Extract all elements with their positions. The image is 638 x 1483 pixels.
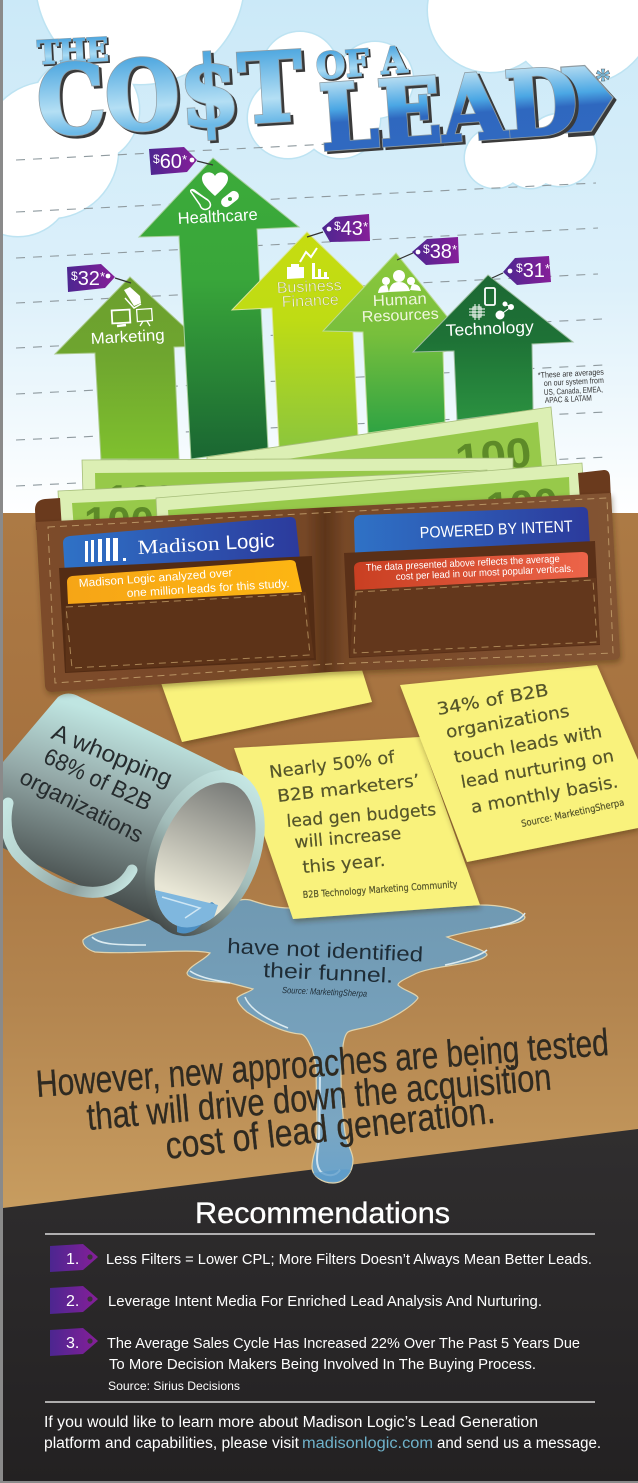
contact paragraph: and send us a message. <box>437 1435 601 1452</box>
title: of a: OF A <box>314 39 409 88</box>
tag: $31: $ <box>516 261 523 275</box>
title: Lead: LEAD <box>316 48 581 172</box>
mug body <box>3 694 243 933</box>
right blue card: POWERED BY INTENT <box>419 518 573 542</box>
wallet stitching <box>48 498 613 683</box>
bill 1: 100 <box>453 428 534 483</box>
tag: $32 <box>67 264 131 292</box>
left pocket front <box>65 592 314 672</box>
icon: people <box>378 270 421 293</box>
mug text <box>20 726 172 842</box>
footnote <box>538 368 604 405</box>
tag: 3: 3. <box>66 1335 79 1352</box>
table surface <box>3 513 638 1213</box>
icon: chip <box>469 304 485 320</box>
tag: $43: $ <box>334 219 341 233</box>
label: Business Finance <box>276 277 342 311</box>
sticky note: 50%: Nearly 50% of <box>268 748 397 783</box>
money bills <box>58 407 586 545</box>
title: of a: OF A <box>316 40 411 89</box>
icon: bar chart <box>312 263 329 279</box>
sticky note: 34%: organizations <box>444 701 571 743</box>
title: Cost: CO$T <box>36 34 309 160</box>
icon: briefcase <box>287 264 304 279</box>
tag: $43: 43 <box>341 218 363 240</box>
title: Cost: CO$T <box>34 31 306 158</box>
left blue card <box>63 517 300 575</box>
tag: 1: 1. <box>66 1251 79 1268</box>
sticky note: blank <box>160 670 372 742</box>
panel: recommendations <box>0 1197 638 1483</box>
wallet <box>35 470 620 692</box>
panel: recommendations background <box>3 1129 638 1483</box>
label: Business Finance: Finance <box>281 292 339 311</box>
puddle highlights <box>92 913 525 1028</box>
title: The: THE <box>36 30 109 72</box>
recommendations heading: Recommendations <box>195 1197 450 1230</box>
bill 2 <box>82 458 513 530</box>
red card: cost per lead in our most popular verticals. <box>396 564 574 583</box>
tag: $38: * <box>452 242 457 257</box>
yellow card: Madison Logic analyzed over <box>78 567 233 590</box>
wallet back <box>35 470 611 530</box>
closing statement: cost of lead generation. <box>163 1090 497 1168</box>
tag: $31: 31 <box>523 260 545 282</box>
mug <box>3 694 265 936</box>
bill 2: 100 <box>106 476 176 523</box>
puddle text: their funnel. <box>263 959 394 988</box>
sticky note: 34%: lead nurturing on <box>459 746 616 793</box>
tag: $32: 32 <box>78 268 100 290</box>
arrow: Marketing <box>55 277 205 459</box>
tag: 2 <box>50 1286 98 1314</box>
mug text: A whopping <box>48 719 176 792</box>
closing statement <box>35 1022 610 1168</box>
arrow: Healthcare <box>139 158 299 459</box>
title <box>34 30 620 174</box>
label: Human Resources <box>361 291 439 326</box>
footnote: *These are averages <box>538 368 604 380</box>
sticky note: 50%: lead gen budgets <box>286 800 437 832</box>
logo mark <box>85 538 126 562</box>
icon: molecule <box>496 302 514 319</box>
mug rim <box>147 770 265 936</box>
tag: $38 <box>397 237 459 265</box>
bill 1 <box>207 407 558 483</box>
tag: $31: * <box>545 261 550 276</box>
sticky note: 34% <box>400 665 638 862</box>
icon: price tag <box>124 287 141 308</box>
page edge <box>0 0 3 1483</box>
clouds <box>0 0 638 236</box>
sticky note: 50%: B2B marketers’ <box>276 771 421 807</box>
left pocket back <box>59 556 316 673</box>
bill 3 <box>156 463 586 540</box>
sticky note: 50%: will increase <box>294 824 402 853</box>
bill 3: 100 <box>484 479 559 531</box>
icon: thermometer <box>191 190 210 209</box>
icon: bandage <box>219 189 241 209</box>
drip shade <box>313 1169 351 1181</box>
Madison Logic wordmark: Madison <box>137 533 220 559</box>
title: The: THE <box>36 30 109 72</box>
title: Cost: CO$T <box>34 31 306 158</box>
tag: $38: $ <box>423 242 430 256</box>
footnote: US, Canada, EMEA, <box>544 385 603 397</box>
tag: 1 <box>50 1244 98 1272</box>
mug handle <box>6 803 132 892</box>
arrow: Human Resources <box>323 253 470 433</box>
recommendation 2 <box>50 1286 542 1314</box>
footnote: APAC & LATAM <box>545 394 592 405</box>
mug text: 68% of B2B <box>40 743 156 816</box>
mug interior <box>154 782 256 926</box>
yellow card <box>67 560 302 604</box>
title: Lead: LEAD <box>319 50 584 174</box>
recommendation 1: Less Filters = Lower CPL; More Filters Doesn’t Always Mean Better Leads. <box>106 1252 592 1268</box>
sticky note: 50% <box>234 737 480 919</box>
rim water <box>177 902 216 933</box>
contact paragraph: platform and capabilities, please visit <box>44 1435 300 1452</box>
icon: phone <box>485 288 495 305</box>
icon: line chart <box>300 248 317 262</box>
recommendation 1 <box>50 1244 592 1272</box>
red card: The data presented above reflects the average <box>366 554 560 574</box>
right blue card <box>354 507 590 556</box>
label: Marketing: Marketing <box>90 327 165 348</box>
water in mug <box>155 890 218 928</box>
tag: $32: * <box>100 269 105 284</box>
recommendation 2: Leverage Intent Media For Enriched Lead Analysis And Nurturing. <box>108 1294 542 1310</box>
tag: $60: 60 <box>160 151 182 173</box>
puddle text: Source: MarketingSherpa <box>282 985 367 999</box>
bill 4 <box>58 470 490 545</box>
title: asterisk: * <box>595 61 611 97</box>
label: Human Resources: Human <box>372 291 427 310</box>
sticky note: 50%: this year. <box>302 851 386 878</box>
tag: $43: * <box>363 219 368 234</box>
tag: 3 <box>50 1328 98 1356</box>
tag: $31 <box>492 256 551 285</box>
sticky note: 50%: B2B Technology Marketing Community <box>302 879 458 901</box>
Madison Logic wordmark <box>137 530 275 559</box>
label: Business Finance: Business <box>276 277 342 297</box>
recommendation 3: Source: Sirius Decisions <box>108 1379 240 1393</box>
sticky note: 34%: touch leads with <box>452 722 604 768</box>
right pocket front <box>350 578 600 657</box>
red card <box>354 552 588 590</box>
sticky note: 34%: Source: MarketingSherpa <box>520 797 625 830</box>
puddle and drip <box>83 899 525 1183</box>
arrow: Technology <box>413 275 573 420</box>
title: Lead: LEAD <box>316 48 581 172</box>
contact paragraph <box>44 1414 601 1452</box>
title: of a: OF A <box>314 39 409 88</box>
footnote: on our system from <box>544 376 604 388</box>
tag: $38: 38 <box>430 241 452 263</box>
puddle text: have not identified <box>227 935 424 967</box>
icon: heart <box>202 172 228 196</box>
sky background <box>0 0 638 515</box>
recommendation 3: The Average Sales Cycle Has Increased 22% Over The Past 5 Years Due <box>107 1336 580 1352</box>
tag: $60 <box>149 147 213 175</box>
tag: $32: $ <box>71 269 78 283</box>
label: Human Resources: Resources <box>361 306 439 326</box>
arrow: Business Finance <box>232 232 382 447</box>
label: Technology: Technology <box>445 318 535 340</box>
tag: $43 <box>307 214 370 242</box>
icon: monitor and easel <box>112 309 152 326</box>
puddle text <box>227 935 424 999</box>
bill 4: 100 <box>84 498 154 545</box>
recommendation 3 <box>50 1328 580 1393</box>
tag: $60: $ <box>153 152 160 166</box>
recommendation 3: To More Decision Makers Being Involved In The Buying Process. <box>109 1357 536 1373</box>
mug text: organizations <box>16 763 148 848</box>
right pocket back <box>344 541 600 658</box>
tag: $60: * <box>182 152 187 167</box>
wallet body <box>36 493 620 692</box>
drip highlight <box>317 1077 340 1175</box>
contact paragraph: If you would like to learn more about Madison Logic’s Lead Generation <box>44 1414 538 1431</box>
sticky note: 34%: a monthly basis. <box>469 772 620 818</box>
title: The: THE <box>38 32 111 73</box>
label: Healthcare: Healthcare <box>177 206 258 228</box>
yellow card: one million leads for this study. <box>126 578 290 600</box>
sticky note: 34%: 34% of B2B <box>435 681 550 720</box>
Madison Logic wordmark: Logic <box>225 530 275 554</box>
tag: 2: 2. <box>66 1293 79 1310</box>
contact paragraph: madisonlogic.com <box>302 1435 433 1452</box>
